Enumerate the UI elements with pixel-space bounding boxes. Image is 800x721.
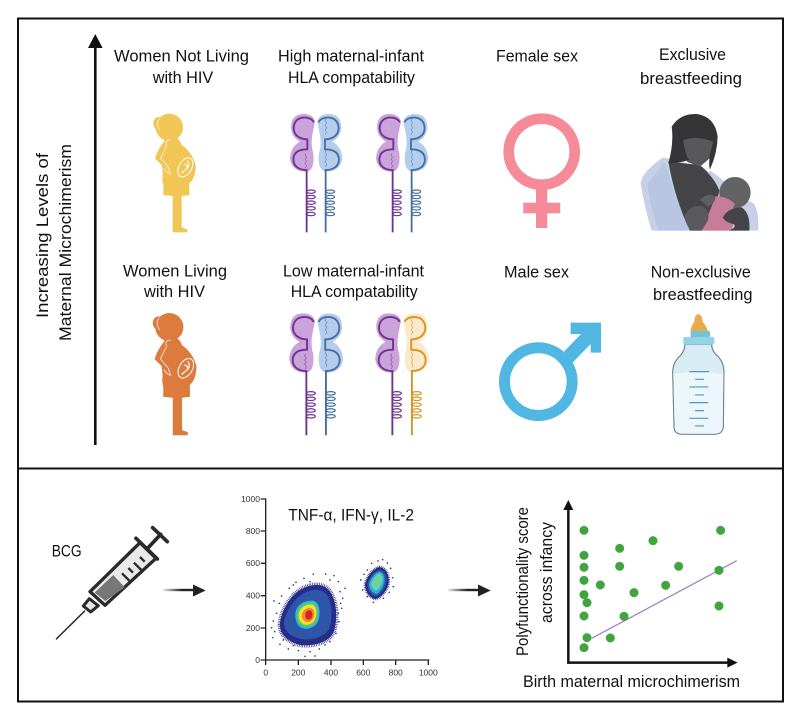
arrow: flow plot to correlation [448, 584, 491, 596]
axis tick labels: 0 [255, 655, 260, 665]
axis tick labels: 200 [291, 668, 306, 678]
icon: male symbol [504, 323, 601, 415]
heading: high HLA compatibility: High maternal-infant [278, 48, 424, 66]
heading: low HLA compatibility: Low maternal-infant [283, 263, 424, 281]
heading: women living with HIV: with HIV [143, 283, 205, 301]
chart: flow cytometry density plot [241, 494, 438, 678]
panel: maternal microchimerism determinants [18, 18, 783, 468]
heading: non-exclusive breastfeeding [651, 264, 752, 304]
heading: women living with HIV: Women Living [123, 263, 227, 281]
axis label: increasing levels of maternal microchimerism: Increasing Levels of [34, 153, 52, 318]
axis label: increasing levels of maternal microchimerism: Maternal Microchimerism [57, 144, 75, 341]
y axis label: Polyfunctionality score [514, 507, 532, 656]
axis tick labels: 1000 [419, 668, 438, 678]
heading: non-exclusive breastfeeding: Non-exclusive [651, 264, 751, 282]
axis tick labels [241, 494, 438, 678]
y axis label: across infancy [538, 521, 556, 623]
axis tick labels: 200 [246, 623, 260, 633]
axis tick labels: 400 [246, 590, 260, 600]
icon: matched HLA pair one [290, 114, 342, 232]
panel: BCG vaccine response [18, 468, 783, 702]
cell cluster small [360, 559, 394, 603]
axis tick labels: 1000 [241, 494, 260, 504]
heading: female sex: Female sex [496, 48, 579, 66]
heading: high HLA compatibility [278, 48, 424, 87]
heading: women not living with HIV [114, 48, 249, 87]
icon: baby bottle [673, 314, 724, 434]
axis tick labels: 800 [389, 668, 403, 678]
heading: male sex: Male sex [504, 264, 570, 282]
icon: mismatched HLA pair [375, 313, 429, 435]
cell cluster large [271, 573, 346, 657]
heading: low HLA compatibility [283, 263, 424, 301]
icon: matched HLA pair two [376, 114, 428, 232]
arrow: syringe to flow plot [163, 584, 206, 596]
x axis label: Birth maternal microchimerism [523, 673, 740, 691]
axis tick labels: 400 [324, 668, 338, 678]
y axis label [514, 507, 556, 656]
heading: low HLA compatibility: HLA compatability [291, 283, 418, 301]
axis tick labels: 0 [263, 668, 268, 678]
axis tick labels: 600 [356, 668, 371, 678]
plot axes [261, 498, 429, 665]
axis label: increasing levels of maternal microchimerism [34, 144, 75, 341]
icon: matched HLA pair row two [289, 313, 343, 435]
axis tick labels: 600 [246, 558, 260, 568]
heading: non-exclusive breastfeeding: breastfeeding [653, 286, 752, 304]
arrow: increasing levels [88, 34, 103, 445]
icon: female symbol [509, 119, 575, 228]
heading: exclusive breastfeeding: breastfeeding [640, 70, 742, 88]
title: cytokines: TNF-α, IFN-γ, IL-2 [288, 507, 414, 525]
heading: exclusive breastfeeding [640, 46, 742, 88]
chart: polyfunctionality scatter plot [514, 500, 740, 691]
heading: women living with HIV [123, 263, 227, 301]
icon: mother breastfeeding [641, 114, 758, 231]
heading: high HLA compatibility: HLA compatability [288, 69, 416, 87]
icon: syringe [56, 528, 167, 639]
heading: women not living with HIV: with HIV [152, 69, 213, 87]
scatter axes [563, 500, 738, 668]
trend line [592, 561, 737, 638]
data points [580, 526, 725, 652]
label: BCG: BCG [52, 543, 82, 561]
axis tick labels: 800 [246, 526, 260, 536]
icon: pregnant woman orange [153, 313, 197, 435]
heading: women not living with HIV: Women Not Living [114, 48, 249, 66]
icon: pregnant woman yellow [153, 114, 196, 232]
heading: exclusive breastfeeding: Exclusive [659, 46, 726, 64]
